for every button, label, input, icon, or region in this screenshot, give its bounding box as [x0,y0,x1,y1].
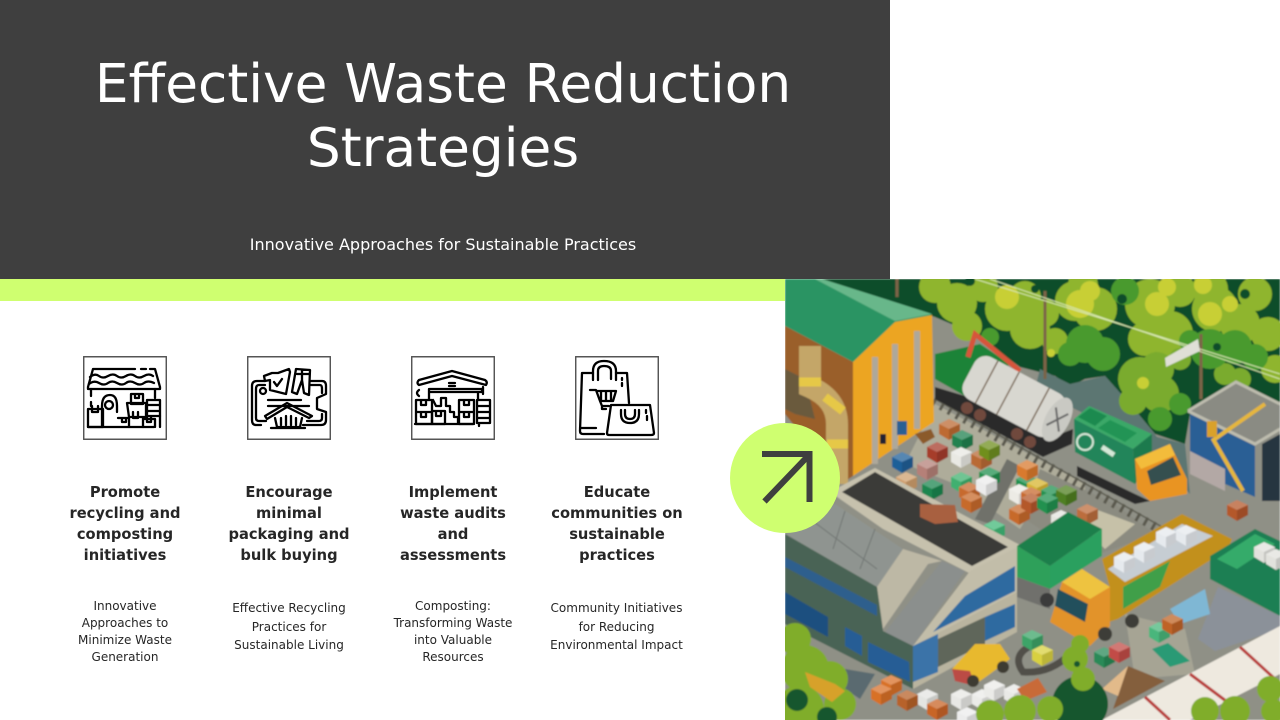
title [95,53,791,179]
cubes upper [892,419,1248,541]
column 3 heading: assessments [400,547,506,564]
column 3 text: Resources [422,650,484,664]
forest [822,279,1280,444]
rail track [933,401,1180,541]
column 1 heading: composting [77,526,173,543]
foreground trees [1052,676,1108,720]
column 4 heading [551,484,683,564]
icon: shopping bags with cart [575,356,659,440]
column 2 heading: minimal [256,505,322,522]
column 4 text [550,601,683,652]
icon: arrow [762,454,810,502]
lower green container and yellow truck [1017,512,1102,566]
title: Effective Waste Reduction [95,53,791,115]
green container and orange truck [1074,406,1152,449]
column 1 heading: recycling and [70,505,180,522]
column 1 text: Minimize Waste [78,633,172,647]
column 1 text: Innovative [93,599,157,613]
column 4 heading: sustainable [569,526,665,543]
column 1 text: Approaches to [82,616,168,630]
excavator and wagon [935,344,1010,396]
column 3 text [394,599,512,664]
subtitle: Innovative Approaches for Sustainable Practices [250,235,636,254]
header panel [0,0,890,279]
column 3 heading: and [438,526,468,543]
icon: market stall with boxes [83,356,167,440]
column 4 text: Environmental Impact [550,638,683,652]
column 3 text: Composting: [415,599,491,613]
tank [958,351,1079,446]
column 2 text: Sustainable Living [234,638,344,652]
column 4 text: for Reducing [579,620,654,634]
column 2 heading: packaging and [228,526,350,543]
column 4 heading: communities on [551,505,683,522]
lower building [830,468,1020,574]
column 2 heading [228,484,350,564]
car and road items [952,644,1010,686]
column 3 heading: Implement [409,484,497,501]
green roof building [785,279,932,362]
title: Strategies [307,117,579,179]
arrow badge [730,423,840,533]
column 1 heading: Promote [90,484,160,501]
column 4 heading: Educate [584,484,650,501]
column 2 text: Effective Recycling [232,601,346,615]
column 4 heading: practices [579,547,655,564]
right lower containers and pipes [1210,529,1280,616]
column 1 heading [70,484,180,564]
column 3 text: into Valuable [414,633,492,647]
column 2 text [232,601,346,652]
column 1 text: Generation [92,650,158,664]
illustration: isometric waste facility [785,279,1280,720]
column 4 text: Community Initiatives [551,601,682,615]
icon: warehouse with boxes [411,356,495,440]
icon: basket and online shopping card [247,356,331,440]
ground patches [905,404,1085,529]
right building [1188,382,1280,444]
column 1 heading: initiatives [84,547,166,564]
column 2 heading: Encourage [245,484,333,501]
lime accent bar [0,279,785,301]
column 2 text: Practices for [252,620,326,634]
column 3 heading [400,484,506,564]
column 1 text [78,599,172,664]
column 3 text: Transforming Waste [394,616,512,630]
column 2 heading: bulk buying [240,547,338,564]
column 3 heading: waste audits [400,505,506,522]
